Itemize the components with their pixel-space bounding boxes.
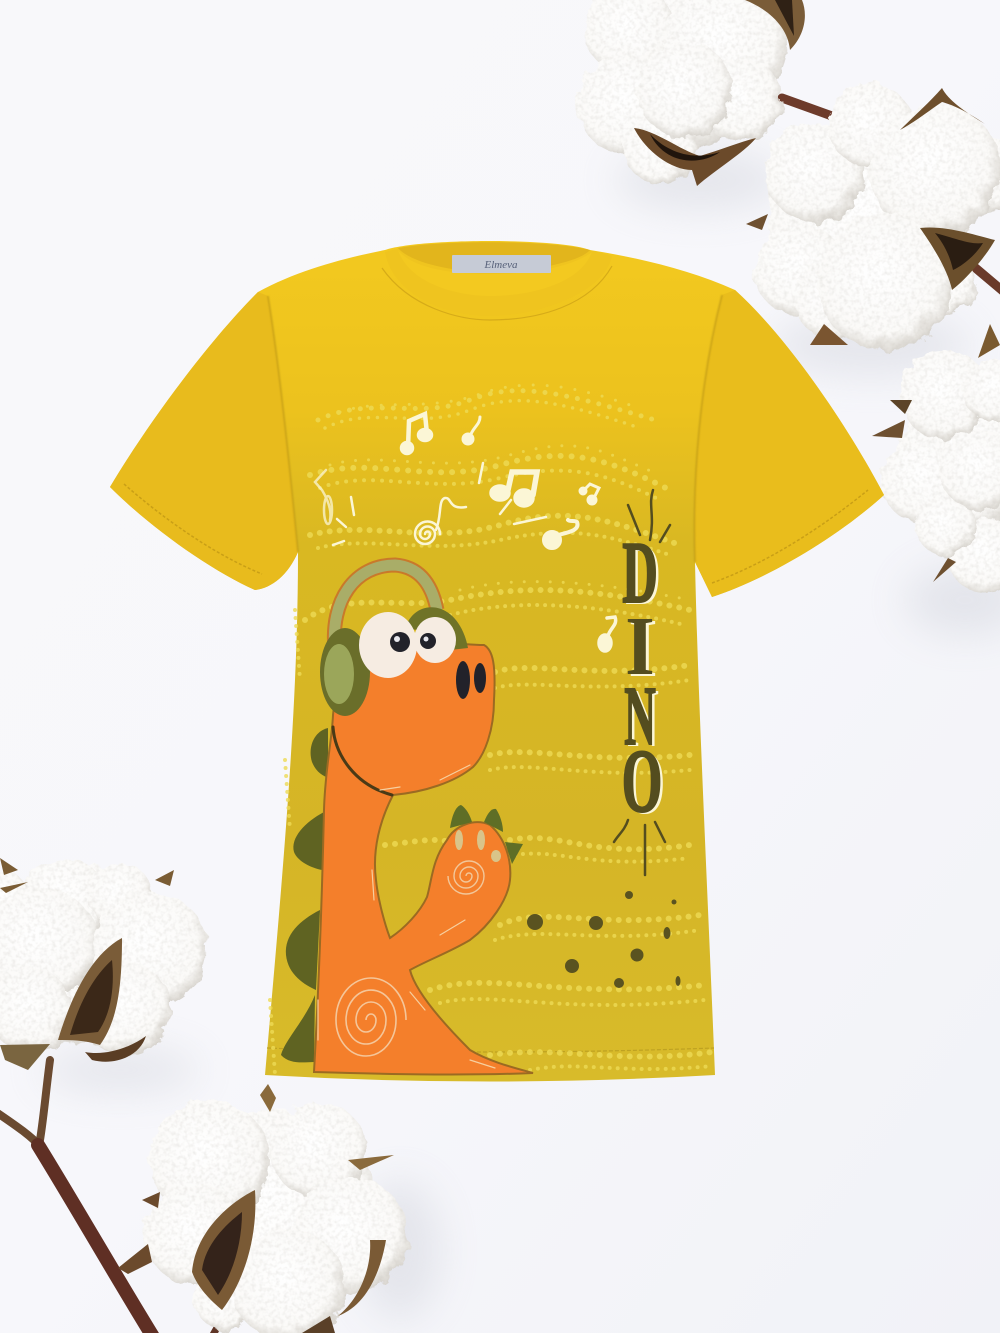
music notes [315,414,616,651]
note: small double [580,484,599,504]
smile [333,727,392,795]
note: top double [402,414,431,453]
lettering: DINO: O [622,730,662,831]
lettering: DINO: O [625,732,665,833]
sleeve shading [110,290,884,597]
note: spiral [415,498,466,544]
headband [334,565,437,650]
note dashes [333,463,546,545]
t-shirt [110,241,884,1082]
lettering: DINO: N [627,672,659,765]
note: top single [463,417,480,444]
paw pads [455,830,501,862]
note: faded left [315,470,332,524]
paw spiral [448,861,484,894]
spikes [281,728,328,1062]
body [314,638,533,1075]
note: near lettering [599,617,616,651]
note: large double [492,472,537,505]
lettering: DINO: I [625,600,655,693]
dinosaur [281,565,533,1075]
cotton boll: top centre [578,0,805,186]
cotton boll: right upper [746,83,1000,350]
cotton boll: bottom [118,1084,408,1333]
cotton boll: left [0,858,208,1070]
cotton boll: right lower [872,324,1000,593]
lettering: DINO [622,524,665,833]
stitch highlights [318,765,495,1068]
lettering: DINO: I [628,602,658,695]
nostrils [456,661,486,699]
lettering: DINO: D [622,524,658,622]
brow [405,607,468,650]
eyes [359,612,456,678]
tail spiral [336,978,406,1056]
lettering: DINO: N [624,670,656,763]
hem stitch [267,1048,714,1052]
paw claws [450,805,523,864]
neck label [452,255,551,273]
headphone cup [320,628,370,716]
note: lower tail [544,520,578,548]
neck label: Elmeva [484,259,518,271]
collar [382,242,612,320]
lettering rays [614,490,670,875]
printed dot bands [270,385,712,1075]
scattered dark dots [527,891,680,988]
lettering: DINO: D [625,526,661,624]
shirt silhouette [110,241,884,1082]
